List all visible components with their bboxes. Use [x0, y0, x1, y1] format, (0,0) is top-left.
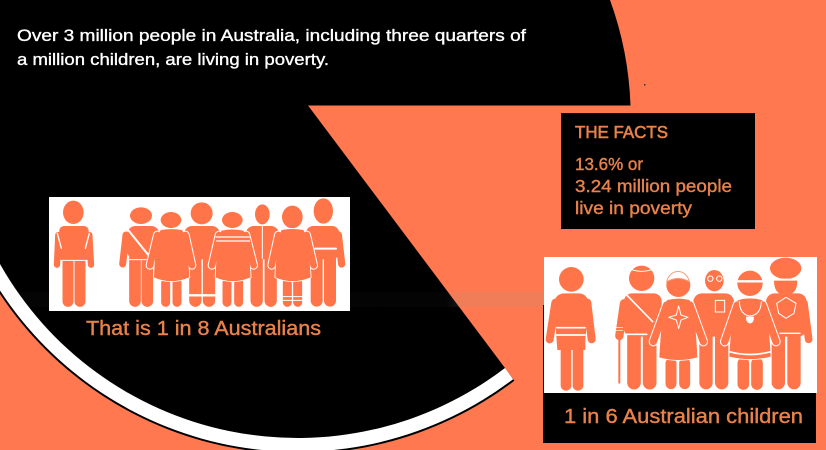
panel: the facts [561, 113, 755, 229]
figure: man with badge [693, 270, 734, 383]
panel: the facts: 13.6% or [575, 154, 643, 174]
figure: woman with glasses and necklace [725, 271, 776, 384]
figure: man with hard hat and shield [766, 258, 809, 383]
speck [644, 84, 646, 86]
figure: woman with star [653, 271, 703, 384]
black pie sector [0, 0, 630, 438]
intro text [17, 26, 526, 69]
caption: 1 in 8: That is 1 in 8 Australians [86, 318, 321, 340]
figure: man with sash and cane [616, 266, 662, 383]
group: front row women [150, 206, 314, 302]
caption: 1 in 6: 1 in 6 Australian children [564, 406, 803, 428]
intro text: Over 3 million people in Australia, including three quarters of [17, 26, 526, 45]
panel: 1 in 6 children [543, 257, 817, 443]
panel: 1 in 8 people icons [49, 197, 350, 311]
intro text: a million children, are living in poverty. [17, 50, 329, 69]
panel: the facts: live in poverty [575, 198, 692, 218]
pie ring: white rim with thin black edge [0, 264, 514, 450]
figure: lone adult [57, 201, 91, 301]
panel: the facts: THE FACTS [575, 122, 668, 142]
group: back row men [123, 198, 342, 301]
figure: lone child [550, 267, 592, 385]
faint horizontal band [0, 292, 544, 307]
panel: the facts: 3.24 million people [575, 176, 732, 196]
